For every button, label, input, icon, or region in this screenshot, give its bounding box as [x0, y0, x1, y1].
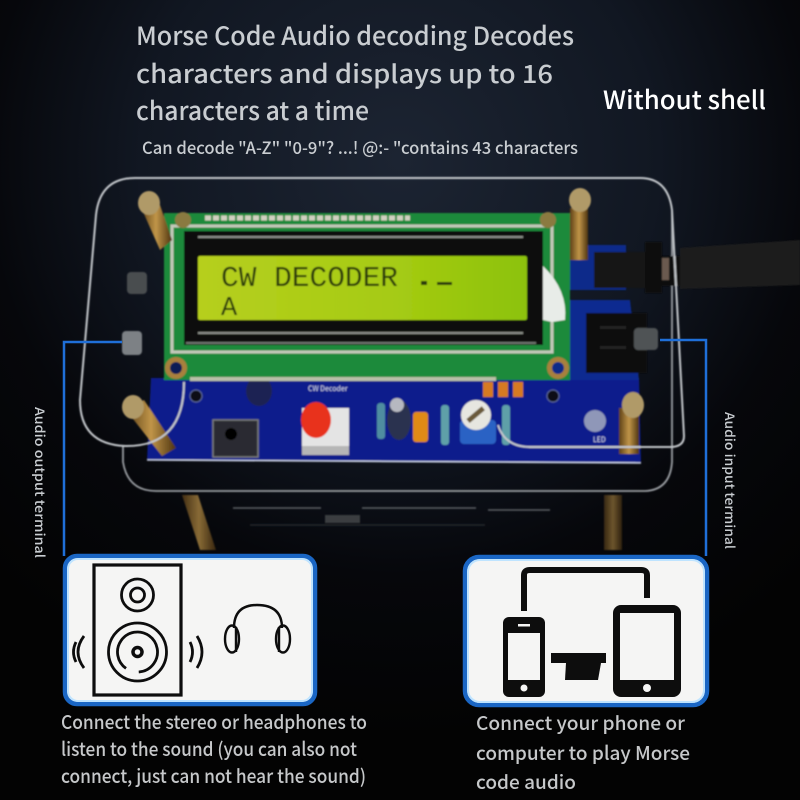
phone	[503, 617, 545, 697]
blue connector line: audio input	[660, 340, 706, 556]
potentiometer	[460, 420, 496, 444]
tactile switch	[213, 420, 258, 457]
LCD module	[164, 212, 570, 381]
caption: speaker: listen to the sound (you can also not	[61, 735, 357, 762]
caption: speaker: connect, just can not hear the sound)	[61, 762, 366, 789]
caption: phone: code audio	[476, 768, 576, 795]
lower brass standoffs	[182, 495, 622, 550]
title: Morse Code Audio decoding Decodes	[136, 17, 574, 53]
panel: phone and computer	[465, 557, 707, 705]
title: characters and displays up to 16	[136, 55, 553, 91]
subtitle: Can decode "A-Z" "0-9"? ...! @:- "contains 43 characters	[142, 134, 578, 159]
label: without shell: Without shell	[603, 81, 766, 117]
title	[136, 17, 574, 128]
board components	[213, 382, 606, 457]
sound waves	[74, 636, 84, 668]
top acrylic plate	[80, 178, 684, 447]
label: audio input terminal: Audio input terminal	[721, 412, 740, 549]
blue PCB	[147, 245, 641, 463]
monitor stand	[551, 653, 606, 663]
LCD mounting holes	[165, 357, 187, 379]
label: audio output terminal: Audio output terminal	[31, 407, 50, 558]
brass standoffs with screws	[122, 188, 644, 456]
caption: speaker	[61, 708, 367, 789]
caption: phone	[476, 709, 690, 795]
LCD screen	[198, 256, 527, 320]
icon: headphones	[225, 605, 290, 652]
tablet	[613, 605, 681, 697]
blue PCB: LED	[593, 435, 606, 445]
icon: speaker	[74, 565, 202, 695]
blue PCB: CW Decoder	[308, 384, 348, 394]
transistor and capacitors	[377, 403, 385, 439]
photo: CW decoder module	[80, 178, 800, 550]
title: characters at a time	[136, 92, 369, 128]
reflection below plate	[233, 508, 550, 525]
jack socket and cable	[586, 240, 800, 373]
caption: phone: computer to play Morse	[476, 739, 690, 766]
icon: devices	[503, 570, 681, 697]
caption: speaker: Connect the stereo or headphones to	[61, 708, 367, 735]
bottom acrylic plate	[123, 210, 672, 491]
side screws	[122, 272, 658, 355]
LCD module: A	[221, 294, 238, 324]
caption: phone: Connect your phone or	[476, 709, 685, 736]
panel: speaker and headphones	[65, 556, 315, 704]
LCD text: CW DECODER	[221, 262, 398, 295]
LED	[584, 410, 606, 432]
blue connector line: audio output	[64, 342, 122, 556]
red push button	[302, 408, 349, 455]
